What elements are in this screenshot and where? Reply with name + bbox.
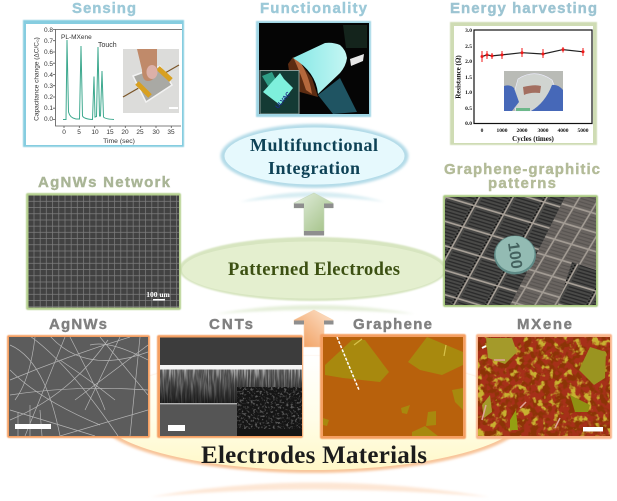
panel: energy harvesting chart [450, 22, 597, 145]
flakes [486, 338, 517, 364]
inset photo: bent film [504, 71, 563, 111]
error bars [482, 47, 583, 62]
y ticks: 0.0 [465, 121, 472, 127]
panel: CNTs micrograph [157, 335, 303, 438]
x ticks: 30 [152, 129, 160, 136]
x ticks [62, 129, 175, 136]
coin: 100 [504, 241, 525, 270]
chart axes [53, 29, 182, 128]
panel: sensing chart [23, 20, 184, 147]
y ticks: 2.0 [465, 59, 472, 65]
reflection under materials ellipse [150, 482, 490, 497]
y ticks: 3.0 [465, 28, 472, 34]
y ticks: 0.0 [44, 116, 53, 123]
y ticks: 0.6 [44, 49, 53, 56]
film rim [288, 57, 318, 97]
coin [494, 236, 536, 274]
label: Patterned Electrodes: Patterned Electrodes [228, 260, 400, 280]
heading: Functionality: Functionality [260, 0, 368, 17]
heading: AgNWs: AgNWs [49, 316, 107, 333]
label: Electrodes Materials: Electrodes Materials [201, 442, 427, 469]
axis titles: Cycles (times) [512, 135, 555, 143]
panel: graphene-graphitic pattern photo [443, 195, 598, 307]
x ticks: 10 [91, 129, 99, 136]
panel: sensing chart: PL-MXene [61, 34, 92, 41]
arrow: green upward [294, 193, 334, 236]
x ticks: 20 [121, 129, 129, 136]
heading: Graphene-graphitic patterns: Graphene-graphitic [444, 161, 600, 178]
x ticks: 5000 [578, 128, 589, 134]
panel: MXene AFM image [476, 334, 612, 439]
y ticks: 0.1 [44, 105, 53, 112]
heading: MXene: MXene [517, 316, 572, 333]
panel: graphene AFM image [320, 334, 466, 439]
label: Multifunctional Integration: Integration [268, 158, 360, 178]
arrow: orange upward [294, 310, 334, 347]
inset photo: finger on sensor [123, 49, 179, 113]
panel: energy harvesting chart: Resistance (Ω) [454, 55, 462, 99]
heading: Graphene-graphitic patterns [444, 161, 600, 192]
heading: Sensing: Sensing [72, 0, 136, 17]
inset: glowing sample: ULVAC [275, 91, 293, 110]
ellipse: electrodes materials base [96, 356, 528, 473]
heading: AgNWs Network: AgNWs Network [38, 174, 171, 191]
x ticks: 0 [481, 128, 484, 134]
chart frame [474, 30, 592, 124]
x ticks: 15 [106, 129, 114, 136]
x ticks: 4000 [558, 128, 569, 134]
ellipse: patterned electrodes [179, 237, 447, 301]
panel: AgNWs network micrograph [26, 193, 181, 310]
y ticks: 0.7 [44, 38, 53, 45]
heading: Graphene-graphitic patterns: patterns [488, 175, 556, 192]
x ticks: 2000 [516, 128, 528, 134]
label: Multifunctional Integration [250, 135, 378, 178]
y ticks: 0.8 [44, 27, 53, 34]
y ticks: 0.3 [44, 83, 53, 90]
reflection under patterned ellipse [215, 305, 415, 314]
resistance line [482, 50, 583, 56]
x ticks: 1000 [496, 128, 508, 134]
ellipse: multifunctional integration [220, 124, 408, 188]
inset micrograph [237, 387, 302, 436]
y ticks [44, 27, 53, 123]
nanotube forest [160, 365, 302, 404]
y ticks: 0.5 [465, 106, 472, 112]
x ticks: 0 [62, 129, 66, 136]
heading: CNTs: CNTs [209, 316, 253, 333]
scale bar [168, 425, 185, 431]
x ticks [481, 128, 589, 134]
nanowires [10, 336, 148, 436]
x ticks: 3000 [538, 128, 549, 134]
background device [343, 25, 367, 48]
line-scan marker [337, 337, 359, 390]
panel: sensing chart: Touch [98, 42, 117, 49]
panel: AgNWs micrograph [7, 335, 150, 438]
y ticks: 0.5 [44, 61, 53, 68]
heading: Energy harvesting: Energy harvesting [450, 0, 597, 17]
y ticks: 1.5 [465, 75, 472, 81]
y ticks: 0.4 [44, 72, 53, 79]
y ticks: 0.2 [44, 94, 53, 101]
label: Multifunctional Integration: Multifunctional [250, 135, 378, 155]
x ticks: 5 [77, 129, 81, 136]
scale bar: 100 um [146, 290, 171, 299]
heading: Graphene: Graphene [353, 316, 432, 333]
y ticks: 1.0 [465, 90, 472, 96]
x ticks: 35 [167, 129, 175, 136]
glowing film [293, 43, 347, 94]
axis titles: Time (sec) [103, 138, 135, 145]
panel: sensing chart: Capacitance change (ΔC/C₀) [34, 37, 40, 121]
x ticks: 25 [136, 129, 144, 136]
scale bar [583, 427, 603, 432]
film reflection [318, 78, 357, 114]
scale bar [15, 424, 51, 429]
y ticks [465, 28, 472, 127]
reflection under integration ellipse [240, 192, 385, 202]
panel: functionality photo [256, 21, 371, 117]
capacitance line [63, 40, 114, 120]
y ticks: 2.5 [465, 44, 472, 50]
